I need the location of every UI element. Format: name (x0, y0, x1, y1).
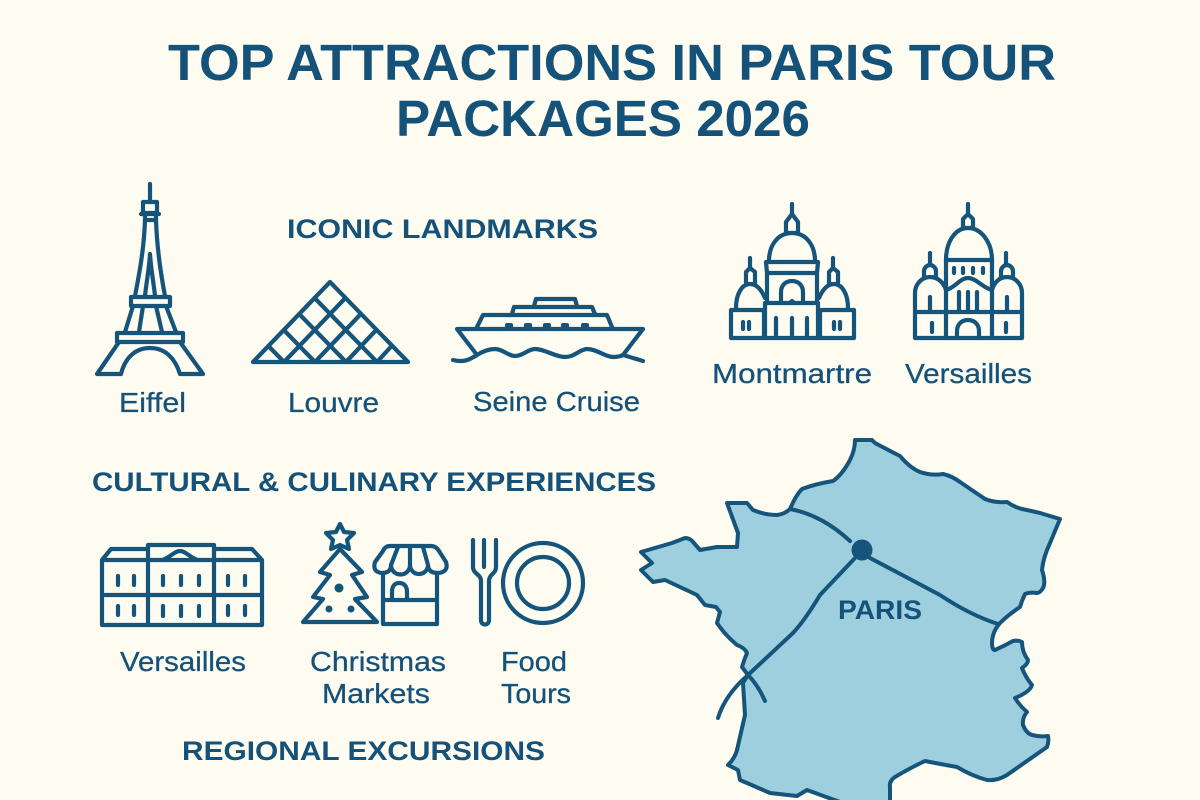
title: PACKAGES 2026 (396, 90, 810, 147)
label: Versailles (landmark): Versailles (905, 358, 1032, 389)
map outline (641, 440, 1060, 800)
heading: iconic landmarks: ICONIC LANDMARKS (287, 214, 598, 244)
label: Louvre: Louvre (288, 387, 379, 418)
icon: Montmartre basilica (731, 204, 854, 338)
label: Paris: PARIS (838, 595, 922, 625)
title: TOP ATTRACTIONS IN PARIS TOUR (168, 34, 1056, 91)
label: Food Tours: Tours (501, 678, 571, 709)
label: Food Tours (501, 646, 571, 709)
icon: fork and plate (473, 540, 583, 624)
icon: Versailles palace (102, 545, 262, 625)
river lines (718, 509, 998, 718)
heading: regional excursions: REGIONAL EXCURSIONS (182, 736, 545, 766)
label: Seine Cruise: Seine Cruise (473, 386, 640, 417)
icon: Seine cruise boat (453, 299, 643, 361)
label: Christmas Markets: Markets (322, 678, 430, 709)
icon: Christmas tree (303, 524, 377, 622)
icon: market stall (374, 546, 447, 624)
label: Montmartre: Montmartre (712, 358, 872, 389)
Paris marker (852, 540, 872, 560)
label: Versailles (palace): Versailles (120, 646, 246, 677)
title (168, 34, 1056, 147)
heading: cultural and culinary: CULTURAL & CULINARY EXPERIENCES (92, 467, 656, 497)
map: France (641, 440, 1060, 800)
icon: Louvre pyramid (253, 282, 408, 362)
label: Christmas Markets: Christmas (310, 646, 446, 677)
label: Food Tours: Food (501, 646, 567, 677)
label: Christmas Markets (310, 646, 446, 709)
icon: Versailles domed building (915, 204, 1022, 338)
icon: Eiffel Tower (97, 184, 203, 374)
label: Eiffel: Eiffel (119, 387, 186, 418)
